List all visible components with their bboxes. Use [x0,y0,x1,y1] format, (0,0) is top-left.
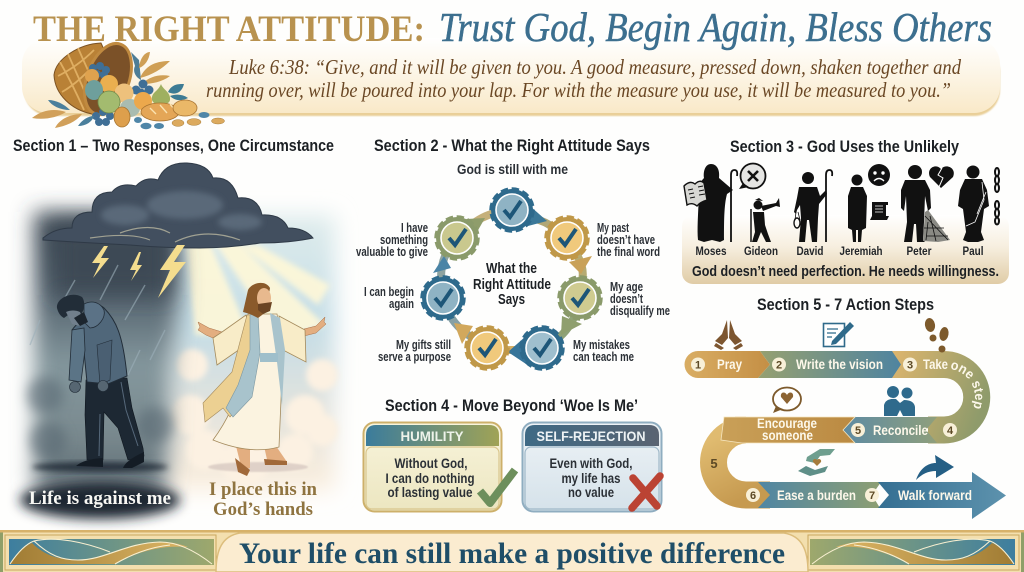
panel: self-rejection: no value [568,485,614,500]
panel: humility: HUMILITY [400,428,464,444]
label: mistakes: can teach me [573,350,634,364]
names: Gideon [744,244,778,258]
icon: footprints [924,317,950,352]
section 4 heading: Section 4 - Move Beyond ‘Woe Is Me’ [385,396,638,415]
badge numerals: 2 [776,360,782,372]
badge numerals: 5 [855,425,861,437]
figure: David with staff and sling [794,170,832,242]
names: Jeremiah [840,244,882,258]
step labels: Walk forward [898,488,972,503]
rain [30,265,165,375]
chart: right attitude cycle [356,188,670,370]
segment: Reconcile [843,417,937,443]
label: valuable to give: I have [401,221,428,235]
badge numerals [695,360,954,502]
footer banner [0,530,1024,572]
label: mistakes: My mistakes [573,338,630,352]
connecting ring [441,213,583,350]
badge numerals: 4 [947,425,954,437]
section 5 heading: Section 5 - 7 Action Steps [757,295,934,314]
lightning bolts [92,245,186,298]
label: valuable to give: something [380,233,428,247]
segment: Walk forward arrow [878,472,1006,519]
label: past: doesn’t have [597,233,655,247]
icon: red cross [632,476,660,508]
icon: speech bubble with heart [773,388,801,413]
step labels: one step [951,362,983,409]
badge numerals: 7 [869,490,875,502]
section 3 heading: Section 3 - God Uses the Unlikely [730,137,959,156]
names: Moses [696,244,727,258]
badge numerals: 5 [710,456,718,471]
right ornament [808,535,1019,570]
step path 3 curve [890,364,977,430]
medallion: mistakes [520,326,564,370]
names: Peter [906,244,932,258]
segment: Encourage someone [721,417,855,443]
figure: Gideon with trumpet [751,198,780,242]
icon: cornucopia basket of fruit and bread [32,37,224,129]
label: begin again [364,285,414,311]
label: gifts: serve a purpose [378,350,451,364]
caption: I place this in God's hands: God’s hands [213,499,313,520]
icon: speech bubble with X [739,164,766,189]
number badges [691,358,957,502]
panel: self-rejection: SELF-REJECTION [536,428,646,444]
center label: Says [498,292,525,308]
segment: Ease a burden [758,482,881,508]
medallion: valuable [436,216,478,260]
panel: self-rejection: Even with God, [550,456,632,471]
man walking in the storm [57,295,144,468]
title [33,4,992,50]
light rays [186,243,330,340]
panel: humility: Without God, [394,456,468,471]
medallion: top [490,188,534,232]
label: gifts [378,338,451,364]
names: David [796,244,824,258]
arrow heads [433,206,592,364]
dark upper haze [55,225,170,295]
label: mistakes [573,338,634,364]
label: past: My past [597,221,630,235]
center label: Right Attitude [473,277,551,293]
verse banner [22,38,1000,116]
panel: humility: I can do nothing [386,471,474,486]
panel: two responses illustration [20,163,338,520]
step labels: Take [923,357,948,372]
panel: humility [364,422,515,512]
dark ground [32,462,168,472]
label: gifts: My gifts still [396,338,451,352]
label: begin again: I can begin [364,285,414,299]
step labels: Write the vision [796,357,883,372]
storm cloud [43,163,313,248]
caption: I place this in God's hands: I place this in [209,479,317,500]
caption: life is against me: Life is against me [29,488,171,509]
medallion: age [558,276,602,320]
center label: What the [486,261,537,277]
soft clouds right [170,349,338,486]
panel: self-rejection [522,422,662,512]
figure: Jeremiah with scroll and sad face [848,164,890,242]
badge numerals: 1 [695,360,701,372]
icon: caring hands with heart [798,449,835,476]
icon: check mark [480,470,515,503]
center label [473,261,551,308]
badge numerals: 6 [750,490,756,502]
panel: self-rejection: my life has [562,471,620,486]
label: age: doesn’t [610,292,644,306]
medallion: begin again [422,276,464,320]
label: past: the final word [597,245,660,259]
label: past [597,221,660,259]
Jesus with raised arms [198,283,326,476]
step labels: Encourage [757,416,817,431]
figure: Paul in robes with broken chain [958,166,999,242]
names: Paul [962,244,984,258]
light heavenly background [165,215,335,490]
medallion: gifts [466,326,508,370]
figure: Peter with net and broken heart [901,165,954,242]
label: valuable to give: valuable to give [356,245,428,259]
step labels: Pray [717,357,742,372]
icon: praying hands [714,320,743,350]
names [696,244,984,258]
panel: humility: of lasting value [388,485,473,500]
figure: Moses [684,164,737,242]
title: THE RIGHT ATTITUDE: [33,9,425,50]
step labels: Ease a burden [777,488,856,503]
label: age [610,280,670,318]
label: age: My age [610,280,643,294]
section 1 heading: Section 1 – Two Responses, One Circumstance [13,136,334,155]
label: begin again: again [389,297,414,311]
badge numerals: 3 [907,360,913,372]
step labels: someone [762,428,813,443]
step labels: Reconcile [873,423,928,438]
label: age: disqualify me [610,304,670,318]
icon: two people hugging [884,386,915,416]
panel: God uses the unlikely [682,164,1009,284]
segment: Pray [684,351,770,378]
caption: I place this in God's hands [209,479,317,520]
label: valuable to give [356,221,428,259]
center plaque [216,533,808,572]
dark storm background [34,212,179,490]
left ornament [5,535,216,570]
icon: curved forward arrow [916,455,954,480]
footer message: Your life can still make a positive difference [239,537,785,570]
subheading: God is still with me: God is still with me [457,161,568,177]
chart: winding 7 action steps path [684,318,1006,519]
icon: note and pen [824,322,854,346]
section 2 heading: Section 2 - What the Right Attitude Says [374,136,650,155]
segment: Write the vision [758,351,901,378]
step labels [717,357,983,503]
step path 5 curve [714,430,770,495]
medallion: past [546,216,588,260]
label blob: dark [20,481,180,519]
dark mist left [27,377,173,458]
scripture verse [206,55,961,102]
